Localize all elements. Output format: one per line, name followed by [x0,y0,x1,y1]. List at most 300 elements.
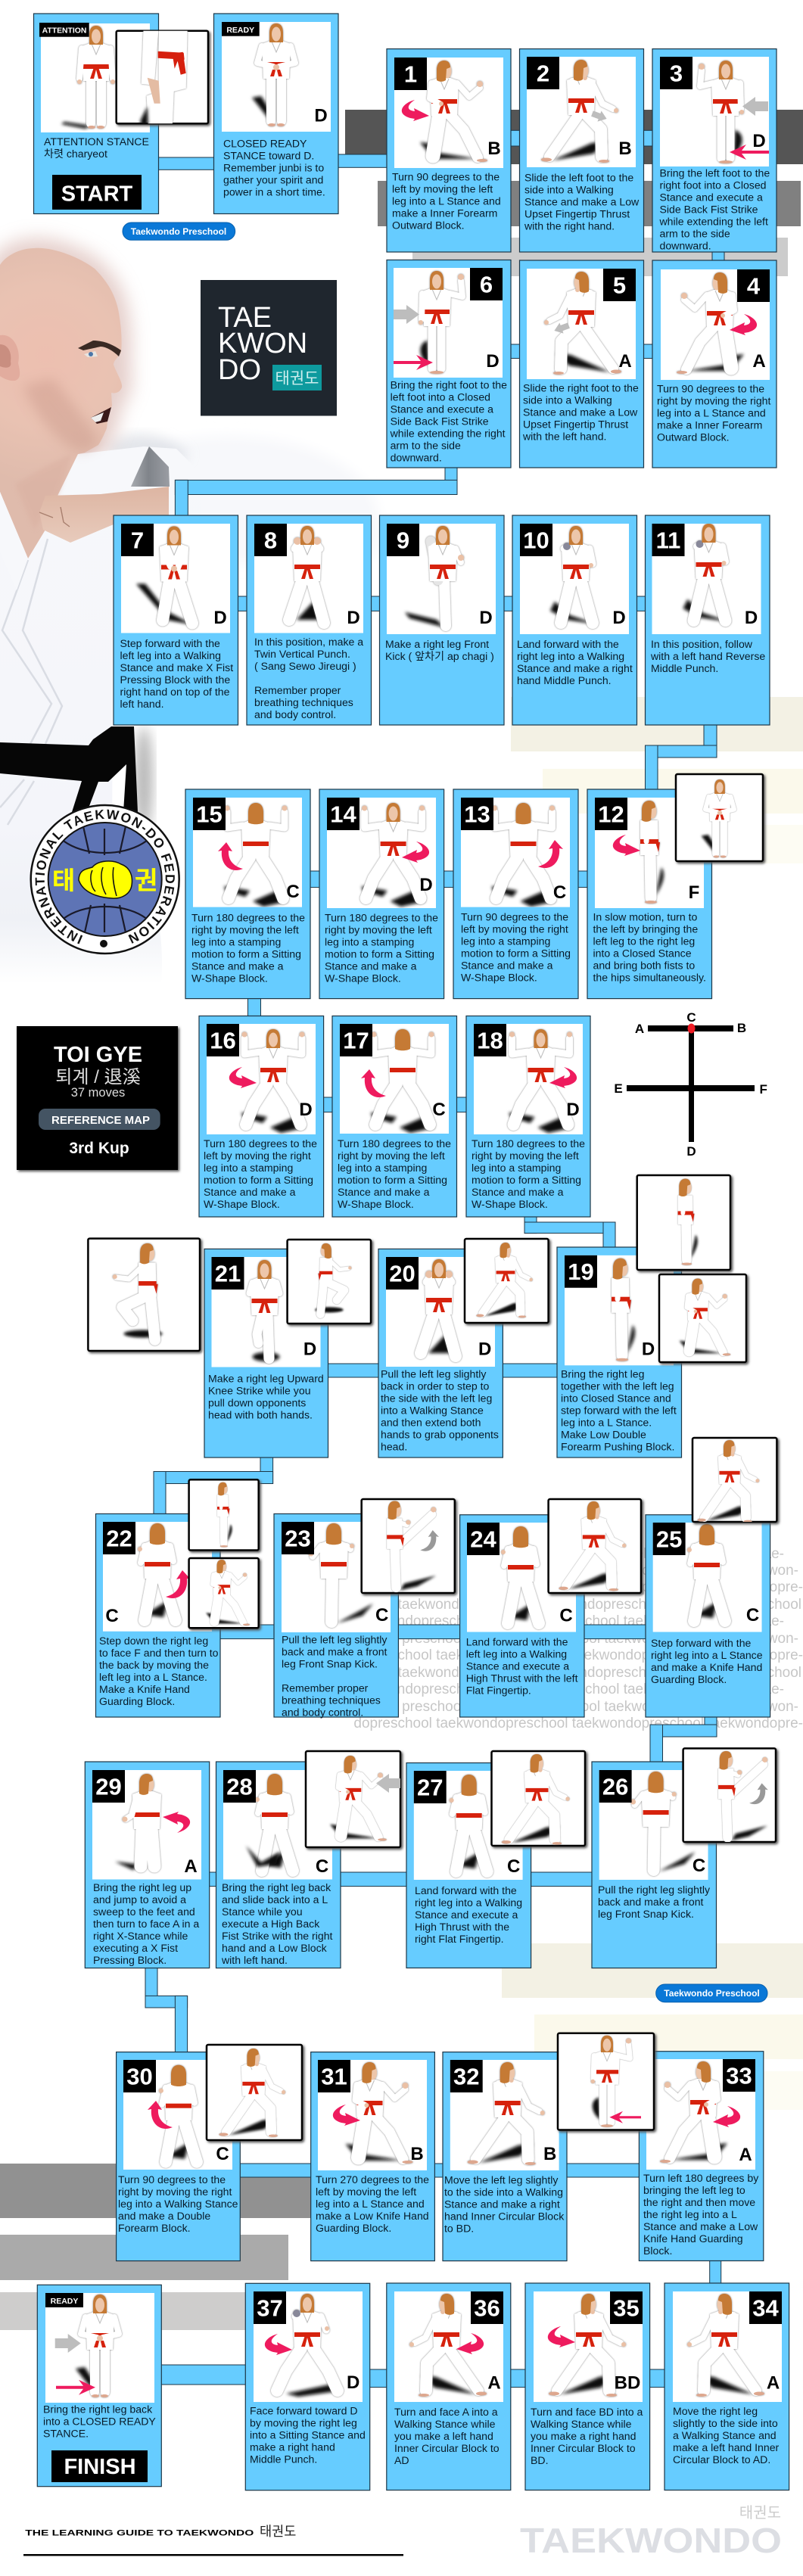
inset photo: step 12 front view [676,774,763,861]
text: step 30: and make a Double [118,2210,210,2222]
panel: step 22 [95,1514,220,1717]
text: step 7: right hand on top of the [120,686,230,698]
photo: step 19 [565,1255,674,1365]
text: step 12: and bring both fists to [593,960,695,972]
text: step 3: Side Back Fist Strike [660,203,758,215]
watermark text: taekwondopreschool: chool taekwondopreschool taekwondopreschool taekwondopre- [397,1647,803,1663]
photo: step 11: D [745,608,758,628]
text: step 21: pull down opponents [208,1397,306,1409]
text: step 26: Pull the right leg slightly [598,1884,711,1896]
photo: step 37: 37 [257,2294,283,2322]
text: step 7: left hand. [120,698,163,710]
text: ready instruction: STANCE toward D. [223,149,314,161]
photo: step 18 [474,1024,583,1134]
badge: Taekwondo Preschool: Taekwondo Preschool [131,226,226,237]
text: step 7: Stance and make X Fist [120,661,233,674]
panel: step 8 [247,515,371,725]
panel: step 2 [519,49,643,252]
panel: step 13 [453,789,578,999]
text: step 19: together with the left leg [561,1380,674,1392]
panel: step 14 [319,789,444,999]
text: step 34: Circular Block to AD. [673,2453,770,2466]
emblem: International Taekwon-Do Federation: 권 [135,866,157,894]
logo block: Tae Kwon Do: DO [218,354,261,386]
text: step 7: left leg into a Walking [120,649,221,661]
photo: step 37 [254,2291,363,2402]
text: step 34: make a left hand Inner [673,2441,780,2453]
text: step 1: left by moving the left [392,183,493,195]
photo: step 13: C [553,882,566,903]
text: step 13: Turn 90 degrees to the [461,911,568,923]
text: step 28: hand and a Low Block [222,1942,328,1954]
text: step 14: Stance and make a [325,960,417,972]
watermark text: taekwondopreschool: dopreschool taekwondopreschool taekwondopreschool taekwondopre- [353,1716,803,1731]
text: step 16: Turn 180 degrees to the [204,1137,317,1150]
photo: step 33: 33 [726,2063,752,2089]
text: step 30: right by moving the right [118,2186,232,2198]
text: step 34: a Walking Stance and [673,2429,777,2441]
photo: step 15 [193,798,302,907]
tag: attention [39,23,89,37]
text: step 4: Turn 90 degrees to the [657,382,764,394]
text: step 33: Turn left 180 degrees by [643,2172,759,2184]
text: step 20: head. [381,1441,407,1453]
text: step 28: Bring the right leg back [222,1881,331,1893]
photo: step 3: D [752,131,766,151]
panel: step 23 [274,1514,398,1718]
text: step 2: Slide the left foot to the [524,172,633,184]
inset photo: attention close-up [117,27,208,126]
panel: step 9 [380,515,504,725]
panel: step 30 [117,2052,240,2261]
photo: step 20 [386,1257,495,1367]
text: step 11: Middle Punch. [651,662,718,674]
text: step 18: leg into a stamping [472,1162,561,1174]
photo: step 24 [467,1523,576,1632]
text: step 6: arm to the side [391,440,461,452]
text: step 20: Pull the left leg slightly [381,1368,487,1380]
text: step 32: Move the left leg slightly [444,2174,559,2186]
photo: step 31 [318,2060,427,2170]
emblem: International Taekwon-Do Federation: INTERNATIONAL TAEKWON-DO FEDERATION [35,810,175,944]
text: step 16: motion to form a Sitting [204,1174,313,1186]
photo: step 27: 27 [417,1774,443,1801]
photo: step 19: 19 [568,1258,594,1285]
text: step 14: right by moving the left [325,923,432,935]
text: step 19: Bring the right leg [561,1368,644,1380]
watermark text: taekwondopreschool: dopreschool taekwondopreschool taekwondopre- [490,1579,803,1595]
panel: step 7 [114,515,238,725]
inset photo: step 22 lower [189,1558,259,1628]
text: step 30: Turn 90 degrees to the [118,2173,226,2186]
text: ready instruction: Remember junbi is to [223,161,324,173]
text: step 10: right leg into a Walking [517,650,624,662]
text: step 13: left by moving the right [461,923,568,935]
watermark text: taekwondopreschool: taekwondopreschool taekwondopreschool taekwondopreschool tae- [352,1682,784,1697]
text: step 23: Remember proper [282,1682,369,1694]
text: step 33: Knife Hand Guarding [643,2232,743,2245]
text: step 22: Guarding Block. [99,1695,175,1707]
photo: step 25 [652,1523,761,1632]
photo: step 36: A [487,2373,501,2394]
text: step 33: the right and then move [643,2196,755,2208]
logo block: Tae Kwon Do: KWON [218,328,307,359]
text: finish instruction: STANCE. [43,2428,89,2440]
text: step 3: Stance and execute a [660,191,763,203]
panel: step 35 [525,2283,650,2490]
photo: step 33: A [739,2145,752,2165]
text: step 35: you make a right hand [531,2430,636,2442]
footer tagline [23,2524,403,2556]
text: step 29: right X-Stance while [93,1930,188,1942]
text: step 33: bringing the left leg to [643,2184,745,2196]
photo: step 8: D [347,608,360,628]
reference map diagram: D [686,1144,696,1159]
photo: step 6 [394,268,503,378]
photo: step 2: B [618,138,632,159]
photo: step 8 [254,524,363,633]
text: step 14: leg into a stamping [325,935,414,947]
photo: step 10: 10 [523,527,549,554]
photo: step 30: C [216,2144,229,2164]
text: step 27: right leg into a Walking [415,1896,522,1909]
photo: step 7 [121,524,230,633]
text: step 13: Stance and make a [461,960,553,972]
photo: step 1: 1 [404,61,417,88]
inset photo: step 21 knee strike [288,1240,371,1324]
footer wordmark: Taekwondo: TAEKWONDO [520,2521,782,2560]
text: step 21: Knee Strike while you [208,1385,311,1397]
panel: step 6 [387,260,511,468]
text: step 21: head with both hands. [208,1409,313,1421]
photo: step 28: C [316,1856,328,1877]
text: step 16: Stance and make a [204,1186,296,1198]
text: step 3: while extending the left [658,215,768,227]
text: step 16: leg into a stamping [204,1162,293,1174]
text: step 6: Stance and execute a [391,403,493,415]
badge: Taekwondo Preschool: Taekwondo Preschool [664,1988,760,1999]
photo: step 4 [661,269,770,380]
text: step 31: Turn 270 degrees to the [316,2173,429,2186]
text: step 31: left by moving the left [316,2186,416,2198]
photo: step 13: 13 [464,801,490,828]
photo: step 24: 24 [470,1526,496,1553]
photo: step 24: C [559,1606,573,1626]
text: step 17: right by moving the left [338,1150,445,1162]
panel: step 11 [645,515,770,725]
photo: step 11: 11 [656,527,680,554]
panel: step 1 [387,49,511,252]
badge: Taekwondo Preschool [656,1984,767,2002]
text: step 7: Step forward with the [120,637,220,649]
logo block: Tae Kwon Do: 태권도 [275,370,319,387]
text: step 29: Bring the right leg up [93,1881,191,1893]
finish badge [51,2450,148,2482]
photo: step 11 [652,524,761,634]
photo: step 23 [282,1522,391,1632]
footer tagline: THE LEARNING GUIDE TO TAEKWONDO [25,2529,254,2538]
arrow: flow connectors between steps [145,130,724,2388]
text: ready instruction: power in a short time. [223,185,325,198]
photo: step 14 [327,798,436,908]
text: step 29: sweep to the feet and [93,1906,195,1918]
text: step 24: left leg into a Walking [466,1648,567,1660]
reference map diagram: F [760,1082,767,1097]
text: step 1: make a Inner Forearm [392,207,497,219]
panel: step 25 [646,1515,770,1717]
inset photo: step 19 L stance [659,1274,746,1362]
watermark text: taekwondopreschool: kwondopreschool taekwondopreschool taekwon- [488,1563,798,1579]
tag: attention: ATTENTION [42,27,86,35]
text: step 8: breathing techniques [254,696,353,708]
text: step 18: Turn 180 degrees to the [472,1137,585,1150]
title block: Toi Gye [17,1026,178,1170]
text: step 9: Make a right leg Front [385,638,489,650]
text: step 6: left foot into a Closed [391,391,490,403]
text: step 11: In this position, follow [651,638,753,650]
text: step 8: and body control. [254,708,336,720]
text: finish instruction: into a CLOSED READY [43,2416,156,2428]
text: step 2: with the right hand. [524,220,615,232]
text: step 19: leg into a L Stance. [561,1417,652,1429]
panel: finish, closed ready stance [37,2285,161,2487]
title block: Toi Gye: REFERENCE MAP [51,1114,150,1127]
text: ready instruction: gather your spirit and [223,173,323,185]
tag: ready: READY [51,2297,78,2306]
text: step 5: Upset Fingertip Thrust [523,418,628,431]
photo: step 22: 22 [106,1526,132,1551]
watermark text: taekwondopreschool: taekwondopreschool taekwondopreschool taekwondopreschool tae- [352,1613,784,1629]
text: step 37: Middle Punch. [250,2453,317,2466]
text: step 17: leg into a stamping [338,1162,427,1174]
photo: step 28 [223,1770,332,1880]
panel: step 31 [311,2052,434,2261]
text: step 18: right by moving the left [472,1150,579,1162]
photo: step 23: 23 [285,1526,311,1551]
photo: step 36: 36 [474,2294,500,2322]
photo: step 20: D [478,1339,491,1359]
photo: step 32: 32 [453,2063,479,2090]
panel: step 20 [378,1249,503,1458]
photo: step 22: C [105,1606,119,1626]
title block: Toi Gye: TOI GYE [54,1043,142,1067]
text: step 37: make a right hand [250,2441,335,2453]
text: step 20: the side with the left leg [381,1392,492,1405]
text: step 34: Move the right leg [673,2405,758,2417]
text: step 6: while extending the right [390,428,506,440]
photo: ready stance: D [314,106,328,126]
text: step 37: Face forward toward D [250,2405,358,2417]
photo: step 27: C [507,1856,520,1877]
photo: step 29: A [184,1856,198,1877]
text: step 14: W-Shape Block. [325,972,401,984]
photo: step 8: 8 [264,527,277,554]
text: step 36: AD [394,2454,409,2466]
panel: step 28 [216,1762,341,1968]
background illustration: shouting martial artist [0,248,380,984]
photo: step 5: A [618,351,632,372]
text: step 31: leg into a L Stance and [316,2198,425,2210]
text: step 9: Kick ( 앞차기 ap chagi ) [385,650,494,662]
inset photo: step 33 closed stance [558,2033,654,2130]
photo: step 1: B [487,138,501,159]
panel: step 27 [406,1763,531,1968]
panel: step 29 [85,1762,210,1968]
text: step 6: Bring the right foot to the [391,379,507,391]
photo: step 28: 28 [226,1774,253,1800]
photo: step 5: 5 [613,272,626,298]
photo: step 6: 6 [480,271,493,298]
photo: step 34: 34 [752,2294,779,2322]
photo: step 10 [520,524,629,634]
photo: step 26: C [693,1856,705,1876]
panel: step 26 [592,1762,716,1968]
text: step 16: left by moving the right [204,1150,311,1162]
photo: step 31: B [410,2144,424,2164]
text: step 24: Land forward with the [466,1636,568,1648]
photo: step 12: F [689,882,699,903]
watermark text: taekwondopreschool: preschool taekwondopreschool taekwondopreschool taekwon- [402,1699,798,1715]
watermark text: taekwondopreschool: preschool taekwondopreschool taekwondopreschool taekwon- [402,1631,798,1647]
text: step 22: to face F and then turn to [99,1647,219,1659]
photo: step 3: 3 [670,61,683,86]
text: step 25: Guarding Block. [651,1673,727,1685]
text: step 1: leg into a L Stance and [392,195,501,207]
text: step 20: into a Walking Stance [381,1405,484,1417]
inset photo: step 23 kick [362,1499,455,1593]
text: step 36: Inner Circular Block to [394,2442,500,2454]
inset photo: step 25 [693,1438,777,1523]
text: step 37: into a Sitting Stance and [250,2429,366,2441]
text: step 1: Turn 90 degrees to the [392,171,500,183]
text: step 35: BD. [531,2454,548,2466]
photo: step 26: 26 [602,1774,628,1800]
text: step 2: side into a Walking [524,184,614,196]
start badge [52,175,142,210]
text: step 11: with a left hand Reverse [650,650,765,662]
text: step 22: Make a Knife Hand [99,1683,190,1695]
text: step 12: into a Closed Stance [593,947,692,960]
text: step 15: W-Shape Block. [191,972,268,984]
text: step 23: leg Front Snap Kick. [282,1657,378,1669]
tag: ready [222,22,260,36]
photo: step 15: C [286,882,300,902]
title block: Toi Gye: 37 moves [71,1086,125,1100]
text: step 4: Outward Block. [657,431,730,443]
photo: step 35 [534,2291,643,2402]
text: step 19: into Closed Stance and [561,1392,671,1405]
photo: step 4: A [752,351,766,372]
text: step 15: right by moving the left [191,923,299,935]
text: step 29: then turn to face A in a [93,1918,199,1930]
text: step 3: Bring the left foot to the [660,166,770,179]
text: step 25: right leg into a L Stance [651,1649,763,1661]
panel: step 33 [639,2052,764,2261]
photo: step 7: D [213,608,227,628]
photo: step 16 [207,1024,316,1134]
photo: step 7: 7 [131,527,144,554]
text: step 8: In this position, make a [254,636,363,648]
text: step 7: Pressing Block with the [120,674,230,686]
text: step 13: leg into a stamping [461,935,550,947]
panel: step 17 [332,1016,457,1217]
badge: Taekwondo Preschool [123,222,235,240]
panel: step 12 [587,789,711,999]
photo: step 37: D [347,2372,359,2393]
text: step 29: Pressing Block. [93,1954,167,1966]
inset photo: step 30 [207,2045,302,2140]
photo: step 3 [660,57,769,166]
text: step 34: slightly to the side into [673,2417,778,2429]
text: step 19: Make Low Double [561,1429,646,1441]
photo: step 9 [387,524,496,634]
photo: step 30 [123,2060,232,2170]
text: step 22: left leg into a L Stance. [99,1671,207,1683]
inset photo: step 22 upper [189,1479,259,1550]
photo: step 9: 9 [397,527,409,554]
text: step 28: with left hand. [221,1954,288,1966]
panel: step 37 [245,2283,370,2490]
photo: step 17: 17 [343,1028,369,1053]
text: step 32: to the side into a Walking [444,2186,563,2198]
text: step 4: make a Inner Forearm [657,418,762,431]
text: step 19: step forward with the left [561,1405,677,1417]
panel: step 5 [519,260,643,468]
text: step 30: leg into a Walking Stance [118,2198,238,2210]
text: step 17: W-Shape Block. [338,1198,414,1210]
text: step 37: by moving the right leg [250,2417,357,2429]
text: step 32: to BD. [444,2223,474,2235]
text: step 28: Fist Strike with the right [222,1930,333,1942]
text: attention stance: 차렷 charyeot [44,148,107,160]
text: step 3: right foot into a Closed [660,179,767,191]
panel: attention stance, start [33,14,159,213]
text: step 24: Flat Fingertip. [466,1685,531,1697]
text: ready instruction: CLOSED READY [223,137,307,149]
photo: step 32: B [543,2144,556,2164]
logo block: Tae Kwon Do [201,280,337,416]
text: step 18: W-Shape Block. [472,1198,548,1210]
text: step 4: right by moving the right [657,394,770,406]
photo: step 31: 31 [321,2063,347,2090]
photo: step 10: D [612,608,626,628]
panel: step 10 [512,515,637,725]
text: step 12: the left by bringing the [593,923,698,935]
photo: step 16: 16 [210,1028,236,1053]
inset photo: step 24 thrust [549,1499,641,1593]
text: step 23: Pull the left leg slightly [282,1633,387,1645]
text: step 29: and jump to avoid a [93,1893,186,1906]
text: step 25: Step forward with the [651,1637,752,1649]
photo: step 12 [595,798,704,908]
footer wordmark: Taekwondo: 태권도 [739,2504,781,2522]
text: step 4: leg into a L Stance and [657,406,766,418]
photo: step 5 [527,269,636,379]
inset photo: step 26 kick [683,1748,776,1842]
text: step 10: hand Middle Punch. [517,674,612,686]
photo: step 29 [92,1770,201,1880]
text: step 32: Stance and make a right [444,2198,560,2210]
inset photo: step 19 closed stance [637,1175,730,1270]
text: step 20: hands to grab opponents [381,1429,499,1441]
panel: step 4 [652,260,777,468]
text: step 2: Upset Fingertip Thrust [524,208,630,220]
photo: step 23: C [375,1605,388,1626]
watermark text: taekwondopreschool [352,1546,803,1731]
photo: step 34: A [767,2373,780,2394]
inset photo: step 28 [306,1751,402,1847]
panel: step 36 [387,2283,511,2490]
